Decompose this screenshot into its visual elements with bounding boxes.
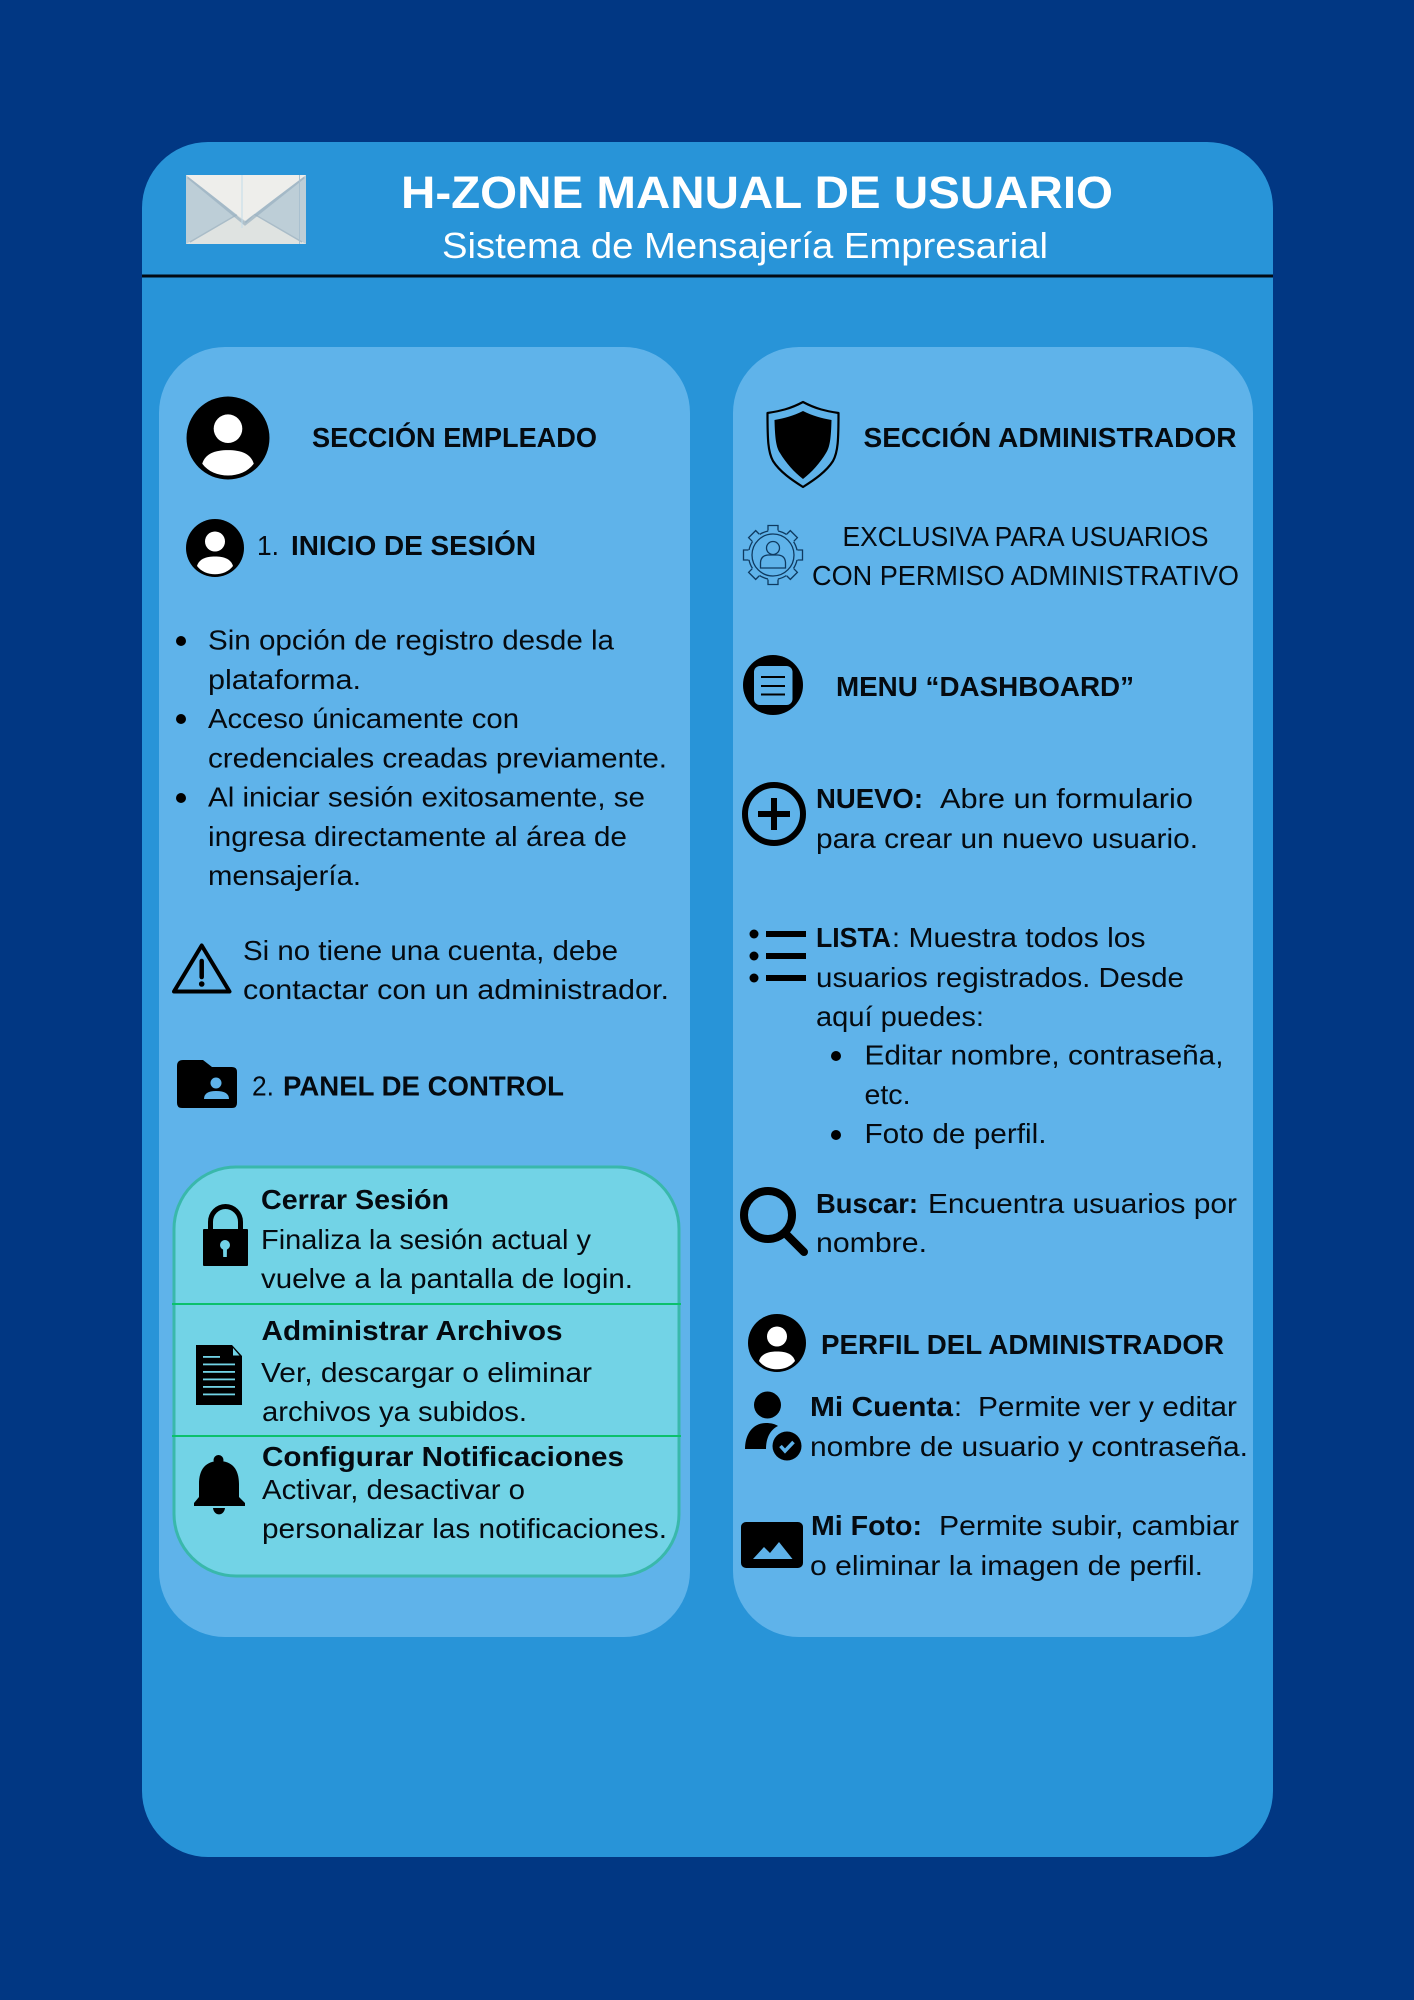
item: buscar: Encuentra usuarios por: [928, 1188, 1237, 1219]
option: configurar notificaciones: [262, 1441, 667, 1544]
icon: admin avatar: [748, 1314, 806, 1372]
item: buscar: nombre.: [816, 1227, 927, 1258]
icon: user folder: [177, 1060, 237, 1108]
main card: [142, 142, 1273, 1857]
sub-list: lista options: [831, 1040, 1224, 1149]
icon: plus: [745, 785, 803, 843]
option: configurar notificaciones: personalizar las notificaciones.: [262, 1513, 667, 1544]
callout: sin cuenta: [243, 935, 669, 1005]
heading: menu dashboard: MENU “DASHBOARD”: [836, 671, 1134, 702]
item: lista: [816, 922, 1224, 1149]
bullet list: inicio de sesión: plataforma.: [208, 664, 361, 695]
option: administrar archivos: archivos ya subidos.: [262, 1396, 527, 1427]
option: cerrar sesión: [261, 1184, 633, 1294]
icon: list: [750, 930, 806, 982]
icon: shield: [768, 402, 838, 487]
icon: admin gear: [744, 526, 802, 584]
item: mi foto: Permite subir, cambiar: [939, 1510, 1239, 1541]
option: cerrar sesión: vuelve a la pantalla de login.: [261, 1263, 633, 1294]
heading: sección administrador: SECCIÓN ADMINISTRADOR: [864, 422, 1236, 453]
bullet list: inicio de sesión: Al iniciar sesión exitosamente, se: [208, 782, 645, 812]
bullet list: inicio de sesión: mensajería.: [208, 860, 361, 891]
icon: warning triangle: [174, 946, 230, 992]
option: administrar archivos: Administrar Archivos: [262, 1315, 562, 1346]
item: lista: LISTA: [816, 922, 891, 953]
item: nuevo: NUEVO:: [816, 783, 923, 814]
panel: sección empleado: [159, 347, 690, 1637]
heading: inicio de sesión: INICIO DE SESIÓN: [291, 530, 536, 561]
bullet list: inicio de sesión: Acceso únicamente con: [208, 703, 519, 734]
icon: padlock: [203, 1206, 248, 1266]
item: mi cuenta: [810, 1391, 1248, 1462]
panel: sección administrador: [733, 347, 1253, 1637]
item: nuevo: para crear un nuevo usuario.: [816, 823, 1198, 854]
title: H-ZONE MANUAL DE USUARIO: [401, 167, 1113, 218]
icon: photo: [741, 1522, 803, 1568]
bullet list: inicio de sesión: ingresa directamente al área de: [208, 821, 627, 852]
icon: menu: [743, 655, 803, 715]
sub-list: lista options: Foto de perfil.: [864, 1118, 1046, 1149]
bullet list: inicio de sesión: credenciales creadas previamente.: [208, 742, 667, 774]
option: configurar notificaciones: Activar, desactivar o: [262, 1474, 525, 1505]
header: [142, 167, 1273, 278]
option: administrar archivos: Ver, descargar o eliminar: [261, 1357, 592, 1388]
item: mi foto: o eliminar la imagen de perfil.: [810, 1550, 1203, 1581]
header divider: [142, 274, 1273, 278]
item: lista: :: [892, 922, 900, 953]
note: permiso administrativo: [812, 521, 1239, 591]
item: lista: usuarios registrados. Desde: [816, 962, 1184, 993]
item: mi cuenta: nombre de usuario y contraseña.: [810, 1431, 1248, 1462]
option: cerrar sesión: Cerrar Sesión: [261, 1184, 449, 1215]
option: administrar archivos: [261, 1315, 592, 1427]
heading: inicio de sesión: 1.: [257, 530, 279, 561]
icon: employee avatar: [187, 397, 269, 479]
note: permiso administrativo: CON PERMISO ADMINISTRATIVO: [812, 560, 1239, 591]
callout: sin cuenta: Si no tiene una cuenta, debe: [243, 935, 618, 966]
panel: control options: [172, 1167, 681, 1576]
option: configurar notificaciones: Configurar Notificaciones: [262, 1441, 624, 1472]
icon: envelope: [186, 175, 306, 244]
callout: sin cuenta: contactar con un administrador.: [243, 974, 669, 1005]
heading: panel de control: PANEL DE CONTROL: [283, 1070, 564, 1102]
icon: login avatar: [186, 519, 244, 577]
item: mi cuenta: :: [954, 1391, 962, 1422]
option: cerrar sesión: Finaliza la sesión actual y: [261, 1224, 591, 1255]
item: buscar: [816, 1188, 1237, 1258]
item: buscar: Buscar:: [816, 1188, 918, 1219]
item: mi cuenta: Mi Cuenta: [810, 1391, 953, 1422]
heading: panel de control: 2.: [252, 1070, 274, 1102]
item: lista: aquí puedes:: [816, 1001, 984, 1032]
sub-list: lista options: etc.: [864, 1079, 910, 1110]
item: nuevo: Abre un formulario: [940, 783, 1193, 814]
bullet list: inicio de sesión: [176, 624, 667, 891]
icon: verified user: [745, 1392, 802, 1460]
heading: sección empleado: SECCIÓN EMPLEADO: [312, 422, 597, 453]
item: nuevo: [816, 783, 1198, 854]
icon: magnifier: [744, 1191, 804, 1252]
note: permiso administrativo: EXCLUSIVA PARA USUARIOS: [842, 521, 1208, 552]
sub-list: lista options: Editar nombre, contraseña,: [864, 1040, 1224, 1070]
item: mi foto: Mi Foto:: [811, 1510, 922, 1541]
bullet list: inicio de sesión: Sin opción de registro desde la: [208, 624, 614, 656]
subtitle: Sistema de Mensajería Empresarial: [442, 225, 1048, 266]
item: mi foto: [810, 1510, 1239, 1581]
item: lista: Muestra todos los: [908, 922, 1146, 953]
icon: bell: [194, 1455, 245, 1514]
heading: perfil del administrador: PERFIL DEL ADMINISTRADOR: [821, 1329, 1224, 1360]
item: mi cuenta: Permite ver y editar: [978, 1391, 1237, 1422]
icon: document: [196, 1345, 242, 1405]
